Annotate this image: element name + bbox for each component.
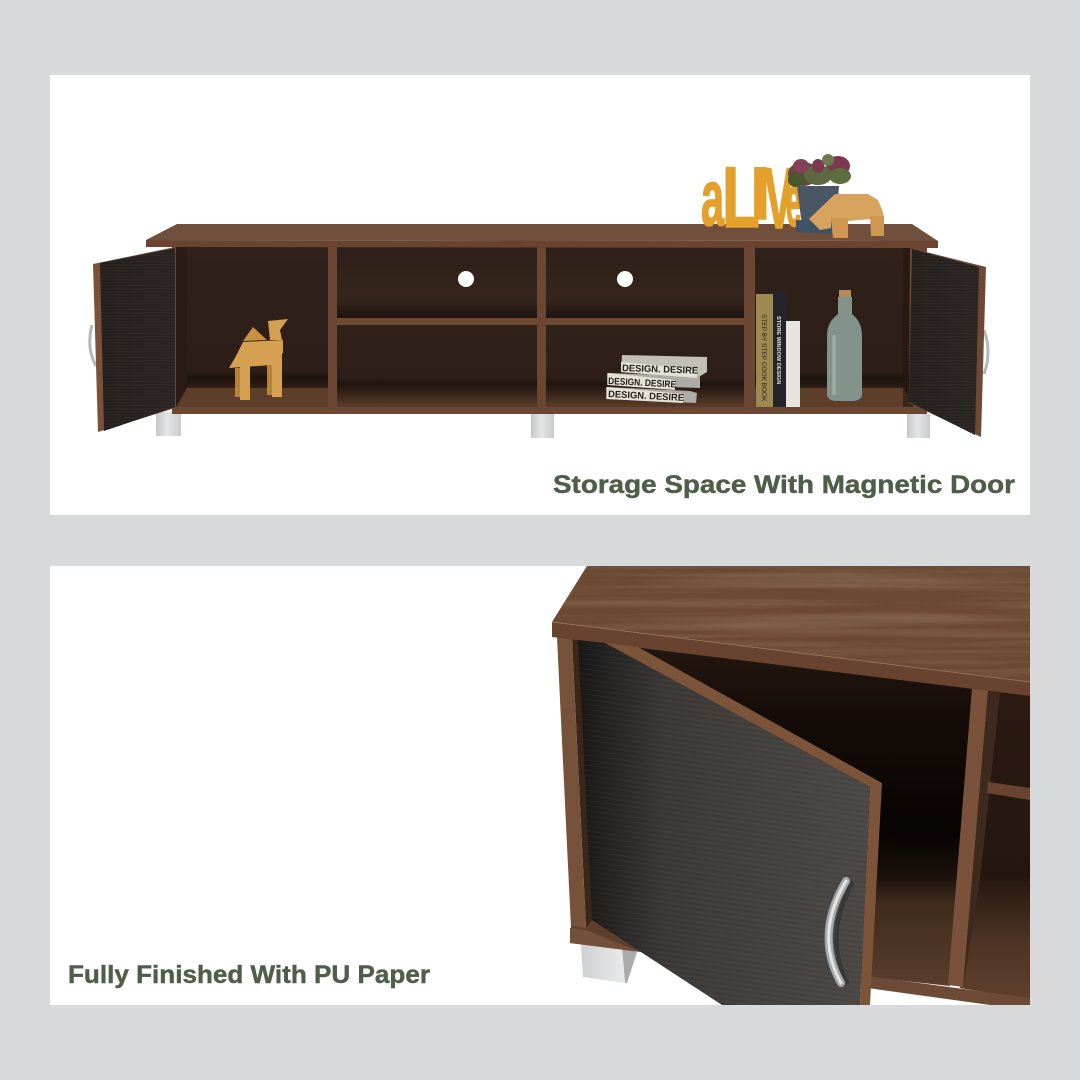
alive word ornament: e [786, 161, 801, 242]
plinth [570, 920, 642, 952]
left side strip [572, 639, 596, 928]
right door [909, 248, 988, 437]
stacked books: DESIGN. DESIRE [608, 389, 684, 404]
camel figurine [229, 319, 288, 400]
potted plant [788, 154, 851, 234]
green bottle [827, 290, 862, 401]
alive word ornament: L [722, 149, 760, 245]
divider [948, 688, 988, 987]
shelf [987, 782, 1030, 800]
upright books: STEP BY STEP COOK BOOK [760, 314, 767, 402]
alive word ornament: V [764, 150, 794, 247]
stacked books: DESIGN. DESIRE [622, 363, 698, 377]
stacked books [606, 355, 707, 404]
metal foot [581, 944, 637, 983]
panel: pu paper [50, 566, 1030, 1005]
cabinet top [146, 224, 938, 248]
tv cabinet with open doors [90, 149, 988, 438]
bottom front edge [860, 975, 1030, 1005]
main interior [605, 640, 975, 986]
caption: pu paper: Fully Finished With PU Paper [68, 961, 430, 989]
panel: storage space [50, 75, 1030, 515]
caption: storage space: Storage Space With Magnetic Door [553, 471, 1015, 499]
alive word ornament: a [701, 152, 724, 243]
cabinet body [172, 246, 927, 414]
alive word ornament: I [750, 152, 771, 235]
closeup body [557, 637, 1030, 1005]
wooden rhino [809, 194, 884, 238]
upright books [756, 292, 800, 407]
cabinet closeup [552, 566, 1030, 1005]
cabinet feet [156, 412, 930, 438]
stacked books: DESIGN. DESIRE [608, 376, 676, 391]
right compartment [960, 688, 1030, 1000]
closeup top [552, 566, 1030, 696]
upright books: STORE WINDOW DESIGN [775, 316, 781, 384]
closeup door [578, 640, 882, 1005]
door handle [829, 881, 853, 984]
alive word ornament [701, 149, 801, 247]
left door [90, 247, 175, 432]
